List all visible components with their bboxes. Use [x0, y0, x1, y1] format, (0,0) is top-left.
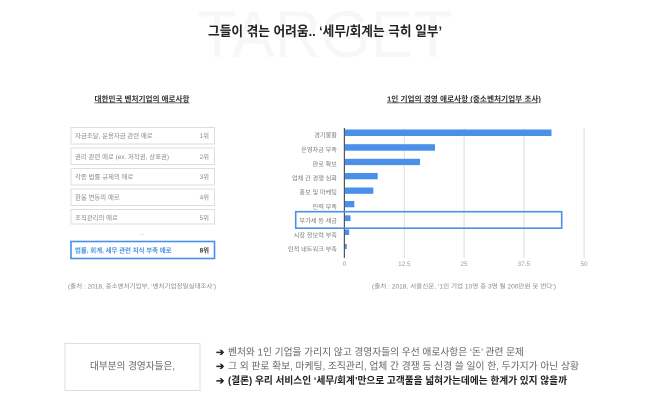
highlighted list item 8: 8위 — [200, 246, 209, 254]
list item 4: 4위 — [200, 194, 209, 202]
bar: 시장 정보력 부족 — [294, 230, 349, 240]
axis labels: 0 — [343, 261, 347, 268]
conclusion line 1: ➔ — [216, 348, 225, 358]
bar: 경기불황: 경기불황 — [314, 132, 337, 140]
bar: 경기불황 — [314, 130, 552, 140]
list item 2 — [71, 148, 214, 164]
axis labels — [343, 261, 588, 268]
heading: chart: 1인 기업의 경영 애로사항 (중소벤처기업부 조사) — [387, 94, 542, 104]
heading: list: 대한민국 벤처기업의 애로사항 — [94, 94, 190, 104]
bar: 업체 간 경쟁 심화 — [292, 173, 378, 182]
list item 4 — [71, 189, 214, 206]
bar: 운영자금 부족: 운영자금 부족 — [301, 146, 337, 154]
bar: 인력 부족: 인력 부족 — [312, 203, 337, 211]
conclusion line 1: 벤처와 1인 기업을 가리지 않고 경영자들의 우선 애로사항은 ‘돈’ 관련 문제 — [228, 346, 524, 358]
bar: 시장 정보력 부족: 시장 정보력 부족 — [294, 232, 337, 240]
bar: 인적 네트워크 부족: 인적 네트워크 부족 — [288, 246, 337, 254]
axis labels: 12.5 — [398, 261, 411, 268]
bar chart — [288, 128, 588, 268]
conclusion line 2: ➔ — [216, 362, 225, 372]
list item 1: 자금조달, 운용자금 관련 애로 — [75, 131, 153, 140]
conclusion line 2: 그 외 판로 확보, 마케팅, 조직관리, 업체 간 경쟁 등 신경 쓸 일이 한, 두가지가 아닌 상황 — [228, 360, 579, 372]
list item 4: 환율 변동의 애로 — [75, 192, 120, 202]
bar: 홍보 및 마케팅: 홍보 및 마케팅 — [299, 188, 337, 196]
title: 그들이 겪는 어려움.. ‘세무/회계는 극히 일부’ — [208, 24, 442, 39]
list item 2: 2위 — [200, 153, 209, 161]
list item 5 — [71, 210, 214, 224]
highlighted list item 8 — [71, 242, 214, 258]
conclusion line 3: ➔ — [216, 376, 225, 387]
callout box: 대부분의 경영자들은: 대부분의 경영자들은, — [90, 360, 175, 372]
bar: 부가세 등 세금 — [299, 215, 350, 225]
axis labels: 50 — [580, 261, 588, 268]
list item 5: 조직관리의 애로 — [75, 213, 118, 222]
source: list: (출처 : 2018, 중소벤처기업부, ‘벤처기업정밀실태조사’) — [68, 282, 216, 290]
bar: 판로 확보 — [312, 159, 420, 168]
highlight box: 부가세 등 세금 — [296, 212, 562, 228]
source: chart: (출처 : 2018, 서울신문, ‘1인 기업 10명 중 3명 월 200만원 못 번다’) — [372, 282, 556, 290]
panel: venture difficulties list — [68, 94, 216, 290]
axis labels: 25 — [460, 261, 468, 268]
list item 2: 권리 관련 애로 (ex. 저작권, 상표권) — [75, 152, 169, 161]
list item 3: 각종 법률 규제의 애로 — [75, 172, 133, 181]
axis labels: 37.5 — [518, 261, 530, 268]
bar: 업체 간 경쟁 심화: 업체 간 경쟁 심화 — [292, 174, 337, 182]
callout box: 대부분의 경영자들은 — [65, 344, 200, 390]
bar: 부가세 등 세금: 부가세 등 세금 — [299, 217, 337, 225]
list item 5: 5위 — [200, 214, 209, 222]
bar: 인적 네트워크 부족 — [288, 244, 347, 254]
conclusions text block — [216, 346, 579, 387]
highlighted list item 8: 법률, 회계, 세무 관련 지식 부족 애로 — [75, 246, 172, 254]
bar: 인력 부족 — [312, 201, 354, 211]
ellipsis: ... — [139, 231, 145, 237]
list item 3 — [71, 168, 214, 185]
conclusion line 3: (결론) 우리 서비스인 ‘세무/회계’만으로 고객풀을 넓혀가는데에는 한계가 있지 않을까 — [228, 374, 567, 387]
bar: 운영자금 부족 — [301, 144, 435, 154]
panel: solo business difficulties chart — [288, 94, 588, 290]
list item 1: 1위 — [200, 132, 209, 140]
bar: 판로 확보: 판로 확보 — [312, 160, 337, 168]
bar: 홍보 및 마케팅 — [299, 188, 373, 196]
list item 3: 3위 — [200, 173, 209, 181]
list item 1 — [71, 128, 214, 144]
